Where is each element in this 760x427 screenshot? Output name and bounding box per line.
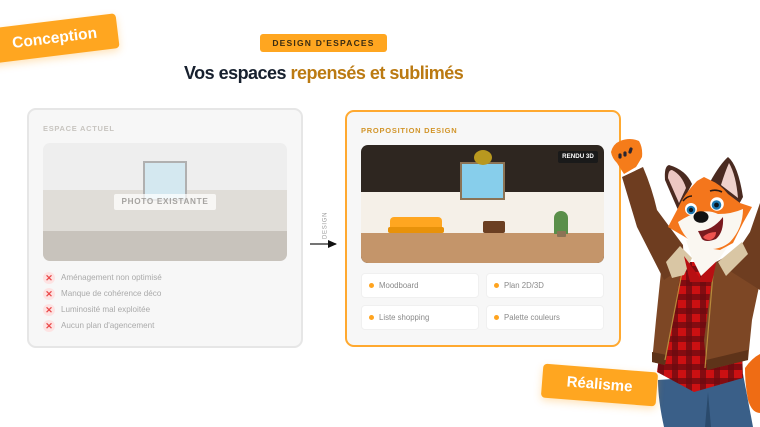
brows bbox=[683, 190, 722, 201]
sofa base bbox=[388, 227, 444, 233]
floor bbox=[361, 233, 604, 263]
head bbox=[668, 177, 752, 250]
left ear bbox=[665, 165, 692, 210]
text: Palette couleurs bbox=[504, 313, 560, 322]
right arm sleeve bbox=[716, 203, 760, 290]
photo label bbox=[114, 194, 216, 210]
tongue bbox=[703, 232, 716, 240]
table bbox=[483, 221, 505, 233]
jacket right panel bbox=[704, 262, 760, 370]
text: Plan 2D/3D bbox=[504, 281, 544, 290]
shirt bbox=[657, 262, 743, 392]
panel: proposition design bbox=[345, 110, 621, 347]
badge: rendu 3D: RENDU 3D bbox=[562, 153, 594, 160]
text: Luminosité mal exploitée bbox=[61, 305, 150, 314]
text: Manque de cohérence déco bbox=[61, 289, 161, 298]
list item: plan bbox=[43, 320, 154, 332]
text: Liste shopping bbox=[379, 313, 429, 322]
text: Aménagement non optimisé bbox=[61, 273, 162, 282]
card: palette couleurs bbox=[486, 305, 604, 330]
jeans fly bbox=[705, 392, 711, 427]
tag: Conception: Conception bbox=[11, 25, 98, 52]
jeans bbox=[658, 374, 753, 427]
panel: espace actuel bbox=[27, 108, 303, 348]
bullet bbox=[494, 283, 499, 288]
illustration: existing room bbox=[43, 143, 287, 261]
bullet bbox=[369, 283, 374, 288]
panel label: proposition design: PROPOSITION DESIGN bbox=[361, 126, 457, 135]
text: Aucun plan d'agencement bbox=[61, 321, 154, 330]
card: liste shopping bbox=[361, 305, 479, 330]
mascot: fox in leather jacket bbox=[611, 139, 760, 427]
floor bbox=[43, 231, 287, 261]
left eye bbox=[685, 203, 697, 215]
list item: coherence bbox=[43, 288, 161, 300]
icon: cross bbox=[43, 304, 55, 316]
jacket left panel bbox=[652, 262, 684, 365]
chest fur bbox=[686, 240, 732, 276]
wall band bbox=[43, 190, 287, 232]
shirt collar bbox=[684, 254, 718, 282]
badge: design d'espaces: DESIGN D'ESPACES bbox=[272, 38, 375, 48]
right eye bbox=[710, 197, 724, 211]
card: plan 2D/3D bbox=[486, 273, 604, 298]
bullet bbox=[369, 315, 374, 320]
panel label: espace actuel: ESPACE ACTUEL bbox=[43, 124, 115, 133]
tail bbox=[745, 354, 760, 413]
muzzle bbox=[678, 209, 743, 249]
arrow: design bbox=[310, 212, 337, 248]
illustration: redesigned room bbox=[361, 145, 604, 263]
collar bbox=[666, 246, 692, 278]
icon: cross bbox=[43, 288, 55, 300]
bullet bbox=[494, 315, 499, 320]
icon: cross: ✕ bbox=[45, 321, 53, 331]
right ear bbox=[710, 157, 743, 206]
nose bbox=[694, 211, 708, 223]
title: Vos espaces repensés et sublimés bbox=[184, 63, 463, 83]
sofa back bbox=[390, 217, 442, 229]
jacket zip bbox=[665, 262, 714, 368]
icon: cross bbox=[43, 320, 55, 332]
lamp bbox=[474, 150, 492, 165]
tag: Réalisme: Réalisme bbox=[566, 373, 633, 396]
tag: Conception bbox=[0, 13, 120, 64]
plant pot bbox=[557, 231, 566, 237]
fist bbox=[611, 139, 642, 174]
icon: cross: ✕ bbox=[45, 273, 53, 283]
list item: amenagement bbox=[43, 272, 162, 284]
plant bbox=[554, 211, 568, 234]
left arm sleeve bbox=[622, 167, 684, 280]
fingers bbox=[620, 149, 631, 157]
list item: luminosite bbox=[43, 304, 150, 316]
badge: design d'espaces bbox=[260, 34, 387, 52]
icon: cross: ✕ bbox=[45, 305, 53, 315]
window bbox=[460, 162, 505, 200]
badge: rendu 3D bbox=[558, 151, 598, 163]
icon: cross bbox=[43, 272, 55, 284]
tag: Réalisme bbox=[541, 364, 658, 406]
text: Moodboard bbox=[379, 281, 418, 290]
wall bbox=[361, 192, 604, 234]
mouth bbox=[698, 217, 723, 241]
icon: cross: ✕ bbox=[45, 289, 53, 299]
window bbox=[143, 161, 187, 201]
photo label: PHOTO EXISTANTE bbox=[121, 197, 209, 206]
arrow: design: DESIGN bbox=[322, 212, 328, 239]
card: moodboard bbox=[361, 273, 479, 298]
jacket hems bbox=[652, 350, 748, 370]
